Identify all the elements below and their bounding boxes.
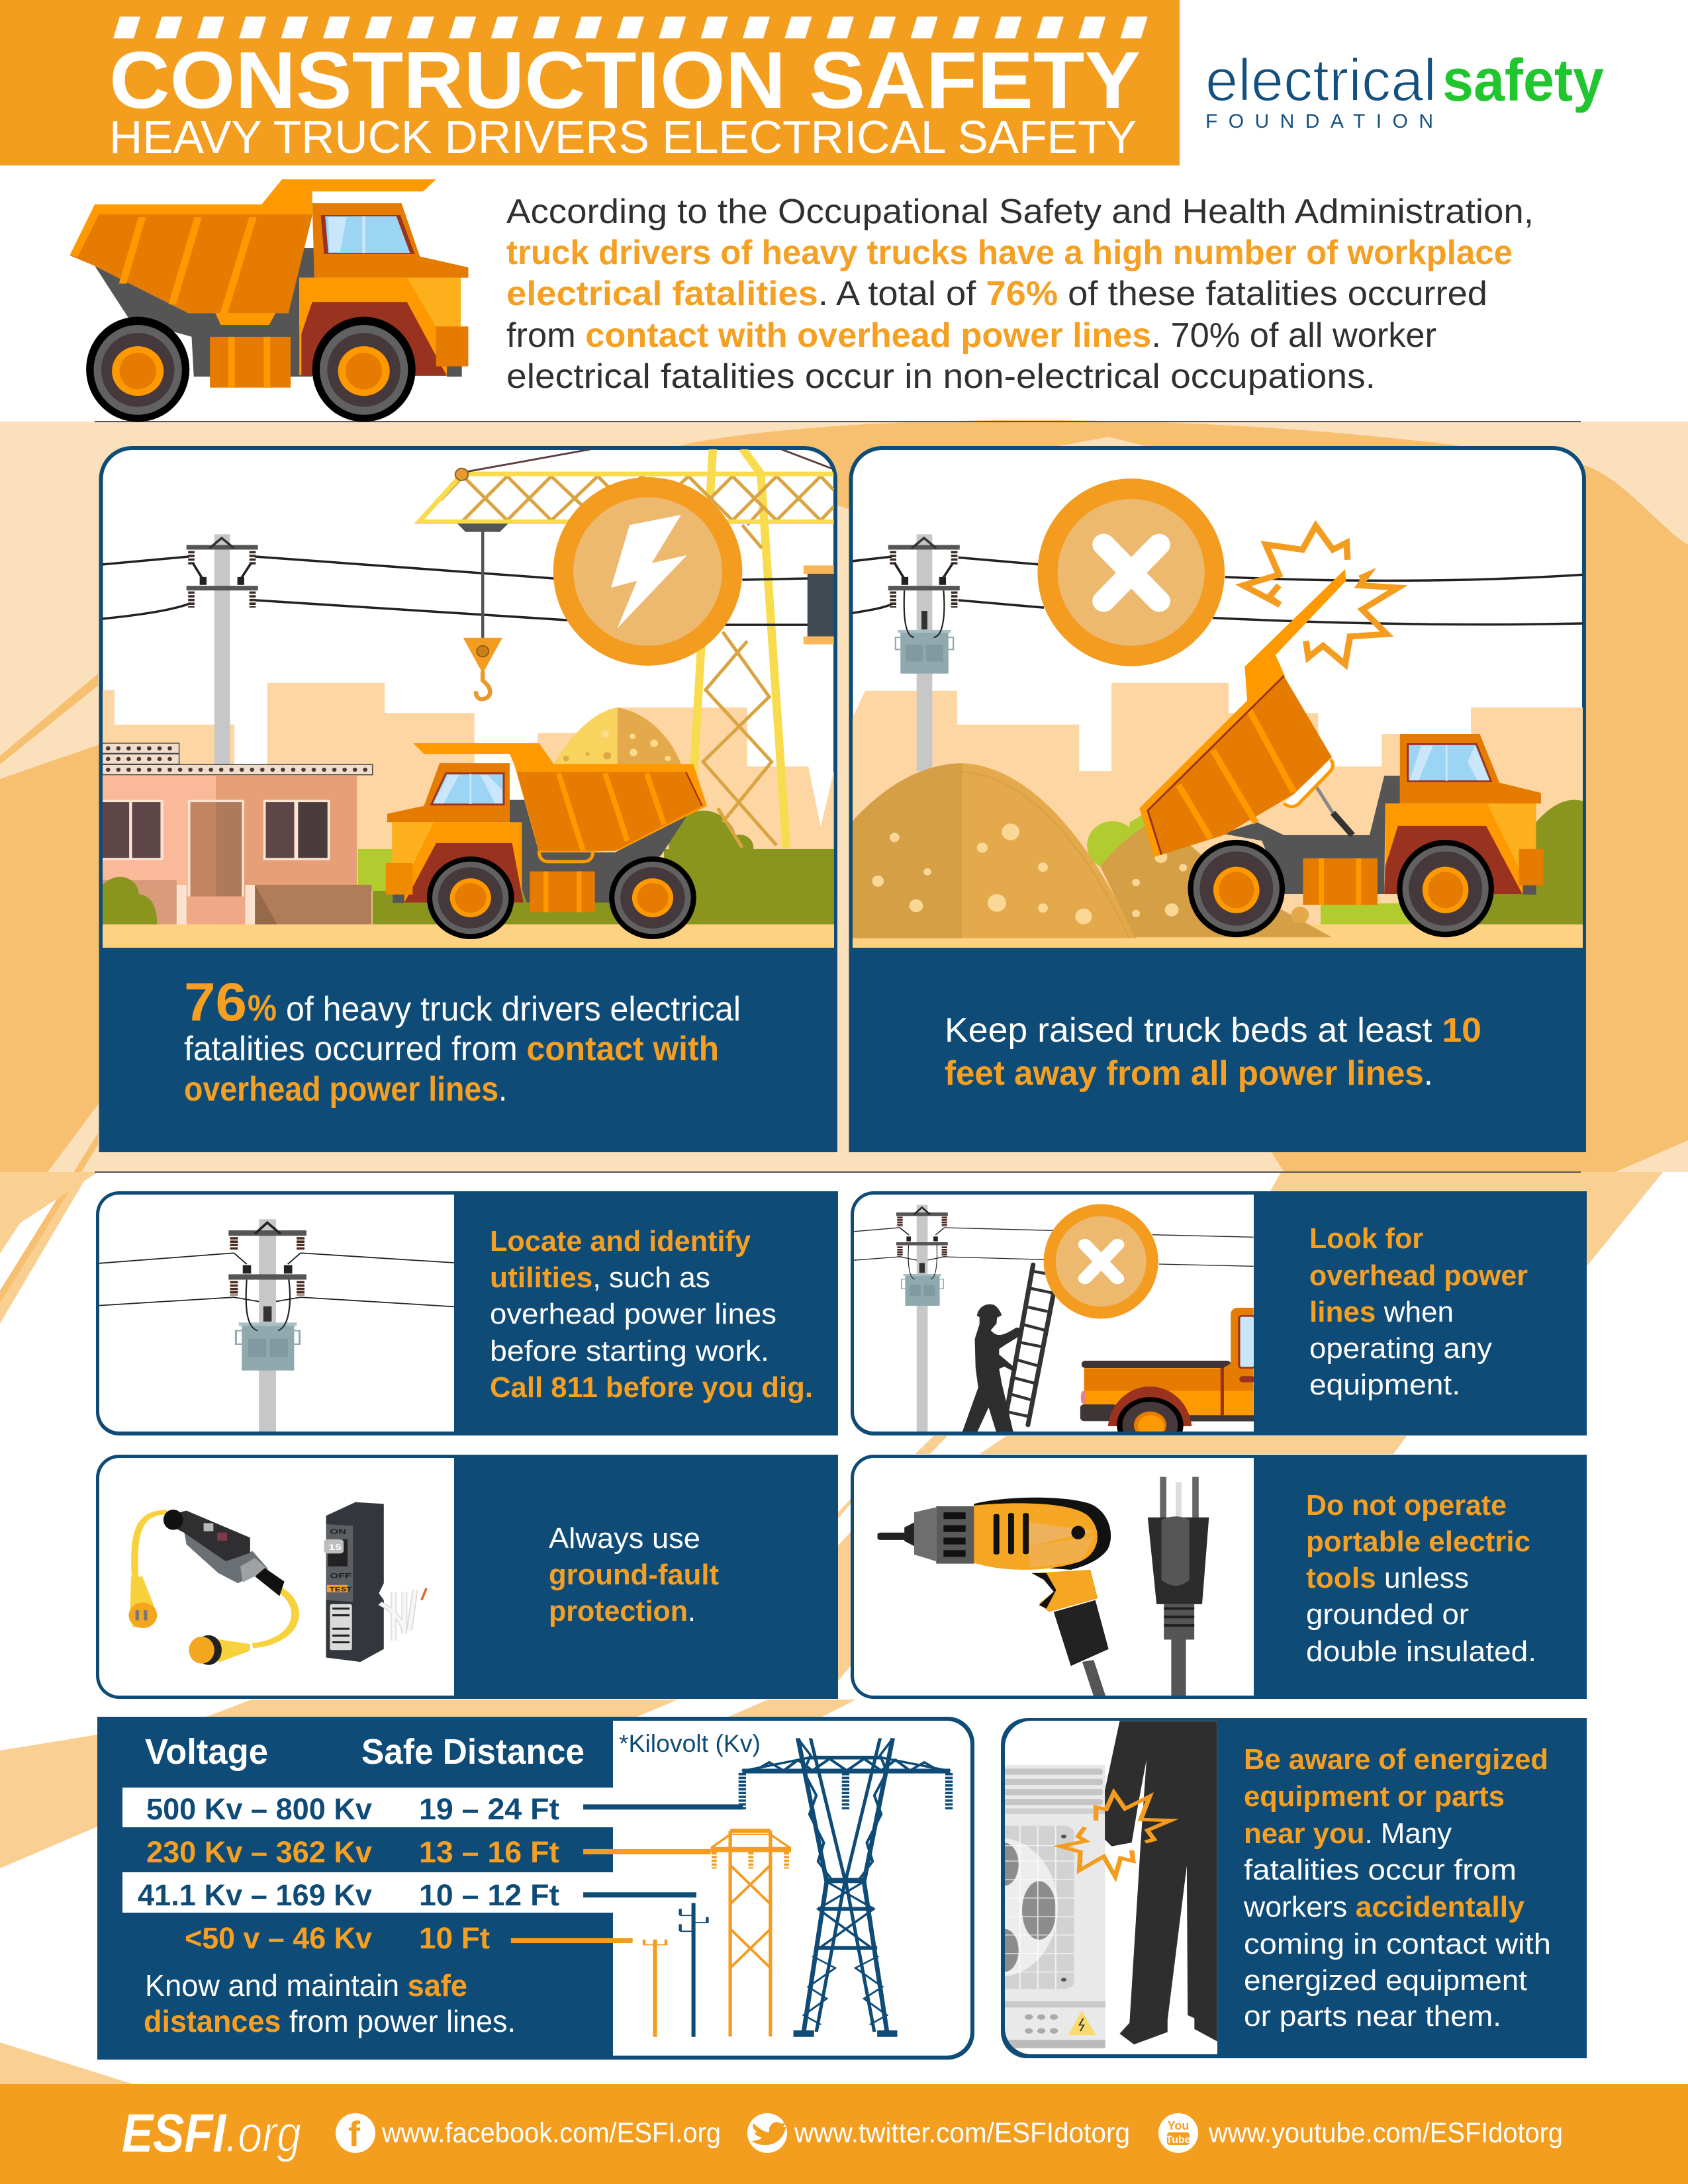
panel: energized equipment xyxy=(941,1718,1587,2058)
text: locate and identify: before starting work. xyxy=(490,1335,769,1367)
icon: distribution pole xyxy=(680,1903,708,2037)
panel: portable electric tools xyxy=(851,1455,1587,1699)
text: 76% of fatalities: overhead power lines. xyxy=(184,1070,507,1109)
text: be aware: fatalities occur from xyxy=(1244,1854,1517,1886)
table headers: Voltage xyxy=(145,1732,268,1772)
panel: safe distance table xyxy=(97,1717,974,2060)
text: always use: Always use xyxy=(549,1522,700,1555)
icon: worker silhouette xyxy=(962,1304,1023,1433)
text: 76% of fatalities xyxy=(184,972,741,1109)
text: do not operate: tools unless xyxy=(1306,1562,1469,1594)
link: twitter: www.twitter.com/ESFIdotorg xyxy=(794,2117,1130,2149)
icon: youtube: Tube xyxy=(1166,2134,1191,2146)
text: locate and identify xyxy=(490,1225,813,1404)
illustration: worker touching AC unit xyxy=(1005,1721,1217,2049)
footer logo: ESFI.org: ESFI xyxy=(122,2103,227,2163)
text: look for lines: Look for xyxy=(1309,1222,1423,1255)
illustration: GFCI adapter and breaker xyxy=(128,1502,426,1665)
icon: shock burst xyxy=(1060,1793,1171,1876)
table rows: 230 Kv – 362 Kv xyxy=(146,1835,372,1869)
logo: electrical safety foundation: electrical xyxy=(1205,48,1436,114)
text: be aware: workers accidentally xyxy=(1243,1891,1525,1923)
icon: spark burst xyxy=(1243,526,1398,664)
icon: twitter xyxy=(747,2113,787,2153)
text: do not operate xyxy=(1306,1489,1536,1668)
text: 10 feet rule xyxy=(945,1011,1481,1093)
text: be aware: equipment or parts xyxy=(1244,1780,1505,1813)
icon: medium tower xyxy=(711,1831,791,2036)
text: know and maintain xyxy=(144,1968,516,2038)
text: know and maintain: distances from power lines. xyxy=(144,2004,516,2038)
text: 10 feet rule: Keep raised truck beds at least 10 xyxy=(945,1011,1481,1050)
icon: youtube xyxy=(1158,2113,1198,2153)
text: always use xyxy=(549,1522,719,1627)
illustration: GFCI adapter and breaker: OFF xyxy=(330,1571,352,1580)
text: know and maintain: Know and maintain safe xyxy=(145,1968,467,2003)
background shapes xyxy=(0,420,1688,2085)
logo: electrical safety foundation: FOUNDATION xyxy=(1205,111,1433,132)
text: do not operate: double insulated. xyxy=(1306,1635,1536,1668)
icon: facebook: f xyxy=(348,2115,361,2154)
text: always use: ground-fault xyxy=(549,1559,719,1591)
text: be aware: near you. Many xyxy=(1244,1817,1452,1850)
icon: youtube: You xyxy=(1168,2119,1189,2132)
table headers xyxy=(145,1732,585,1772)
logo: electrical safety foundation: safety xyxy=(1442,48,1604,114)
label: kilovolt note: *Kilovolt (Kv) xyxy=(619,1730,761,1757)
panel: 76% statistic xyxy=(86,446,850,1152)
table rows: 13 – 16 Ft xyxy=(419,1835,559,1869)
text: locate and identify: overhead power lines xyxy=(490,1298,776,1330)
text: be aware: Be aware of energized xyxy=(1244,1743,1548,1776)
table headers: Safe Distance xyxy=(361,1732,585,1772)
illustration: crane truck under power lines xyxy=(86,449,850,952)
text: look for lines: overhead power xyxy=(1309,1259,1528,1292)
icon: transmission tower xyxy=(742,1738,950,2034)
panel: look for overhead lines xyxy=(851,1191,1587,1453)
text: locate and identify: Call 811 before you dig. xyxy=(490,1371,813,1404)
illustration: GFCI adapter and breaker: 15 xyxy=(328,1543,342,1552)
illustration: drill and plug xyxy=(877,1477,1209,1698)
header banner xyxy=(0,0,1180,165)
logo: electrical safety foundation xyxy=(1205,48,1604,132)
icon: facebook xyxy=(336,2113,375,2154)
intro text: truck drivers of heavy trucks have a high number of workplace xyxy=(506,234,1513,272)
subtitle: HEAVY TRUCK DRIVERS ELECTRICAL SAFETY xyxy=(109,111,1137,163)
text: be aware: energized equipment xyxy=(1244,1964,1527,1997)
link: youtube: www.youtube.com/ESFIdotorg xyxy=(1208,2117,1563,2149)
footer logo: ESFI.org xyxy=(122,2103,301,2163)
text: 76% of fatalities: fatalities occurred from contact with xyxy=(184,1030,719,1068)
text: look for lines: operating any xyxy=(1309,1332,1492,1365)
chart: towers with distance leaders xyxy=(511,1738,950,2037)
text: do not operate: portable electric xyxy=(1306,1525,1530,1558)
text: locate and identify: utilities, such as xyxy=(490,1261,710,1294)
text: look for lines: equipment. xyxy=(1309,1369,1460,1401)
intro text xyxy=(506,193,1534,396)
intro text: electrical fatalities occur in non-electrical occupations. xyxy=(506,357,1376,396)
panel: keep truck beds away xyxy=(841,446,1595,1152)
panel: locate utilities xyxy=(96,1191,838,1435)
text: be aware: or parts near them. xyxy=(1244,2000,1501,2032)
text: look for lines xyxy=(1309,1222,1528,1401)
table rows xyxy=(138,1792,559,1955)
intro text: from contact with overhead power lines. 70% of all worker xyxy=(506,316,1436,355)
illustration: raised truck bed contacting lines xyxy=(841,478,1595,950)
table rows: <50 v – 46 Kv xyxy=(185,1921,372,1955)
panel: ground-fault protection xyxy=(96,1455,838,1699)
text: do not operate: Do not operate xyxy=(1306,1489,1507,1522)
table rows: 19 – 24 Ft xyxy=(419,1792,559,1826)
link: facebook: www.facebook.com/ESFI.org xyxy=(381,2117,721,2149)
title: CONSTRUCTION SAFETY xyxy=(109,35,1141,125)
icon: prohibited badge xyxy=(1037,478,1225,666)
illustration: GFCI adapter and breaker: TEST xyxy=(330,1586,352,1593)
table rows: 500 Kv – 800 Kv xyxy=(146,1792,372,1826)
footer logo: ESFI.org: .org xyxy=(226,2105,301,2163)
intro text: According to the Occupational Safety and Health Administration, xyxy=(506,193,1534,231)
icon: lightning bolt badge xyxy=(553,477,742,666)
icon: electrical plug xyxy=(1148,1477,1209,1698)
text: 76% of fatalities: % xyxy=(248,987,277,1028)
illustration: GFCI adapter and breaker: ON xyxy=(330,1527,346,1536)
text: be aware: coming in contact with xyxy=(1244,1928,1551,1960)
icon: worker legs silhouette xyxy=(1105,1721,1217,2044)
text: do not operate: grounded or xyxy=(1306,1598,1469,1631)
text: 10 feet rule: feet away from all power lines. xyxy=(945,1054,1433,1093)
icon: power drill xyxy=(877,1498,1111,1698)
text: 76% of fatalities: of heavy truck drivers electrical xyxy=(286,990,741,1028)
text: always use: protection. xyxy=(549,1595,696,1627)
text: look for lines: lines when xyxy=(1309,1296,1454,1328)
icon: dump truck xyxy=(70,179,468,422)
illustration: worker with ladder and pickup xyxy=(853,1204,1256,1453)
intro text: electrical fatalities . A total of 76% of these fatalities occurred xyxy=(506,275,1487,313)
table rows: 41.1 Kv – 169 Kv xyxy=(138,1878,372,1912)
text: be aware xyxy=(1243,1743,1551,2032)
table rows: 10 – 12 Ft xyxy=(419,1878,559,1912)
text: locate and identify: Locate and identify xyxy=(490,1225,751,1257)
table rows: 10 Ft xyxy=(419,1921,490,1955)
footer xyxy=(0,2084,1688,2184)
icon: low voltage pole xyxy=(643,1940,668,2037)
text: 76% of fatalities: 76 xyxy=(184,972,247,1032)
icon: prohibited badge xyxy=(1044,1204,1158,1319)
illustration: utility pole xyxy=(97,1219,454,1433)
